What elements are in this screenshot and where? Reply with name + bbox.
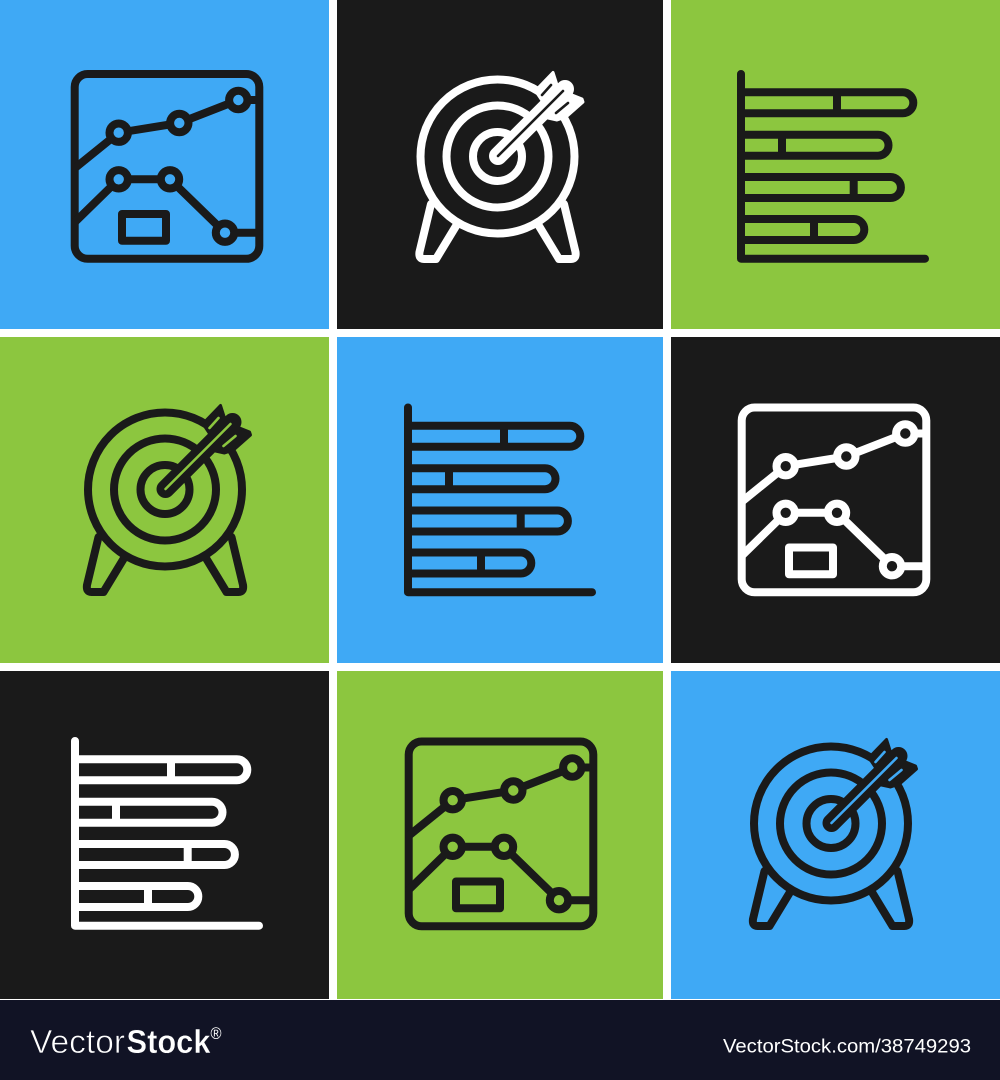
icon: archery target <box>87 406 250 592</box>
icon: archery target <box>419 72 583 259</box>
logo: VectorStock: Vector <box>30 1023 125 1060</box>
panel: black bars <box>0 671 329 999</box>
panel: blue bars <box>337 337 663 663</box>
source url: VectorStock.com/38749293 <box>723 1037 971 1058</box>
logo: VectorStock <box>30 1023 222 1060</box>
panel: black chart <box>671 337 1000 663</box>
panel: blue chart <box>0 0 329 329</box>
logo: VectorStock: ® <box>210 1024 222 1043</box>
icon: line chart <box>75 74 259 259</box>
icon: horizontal bar chart <box>408 408 592 592</box>
panel: blue target <box>671 671 1000 999</box>
icon: line chart <box>409 742 593 926</box>
icon: line chart <box>742 408 926 592</box>
logo: VectorStock: Stock <box>126 1023 211 1060</box>
icon: archery target <box>753 740 916 926</box>
panel: green target <box>0 337 329 663</box>
icon: horizontal bar chart <box>75 741 259 926</box>
panel: green chart <box>337 671 663 999</box>
panel: green bars <box>671 0 1000 329</box>
footer bar <box>0 1000 1000 1080</box>
icon: horizontal bar chart <box>741 74 925 259</box>
panel: black target <box>337 0 663 329</box>
